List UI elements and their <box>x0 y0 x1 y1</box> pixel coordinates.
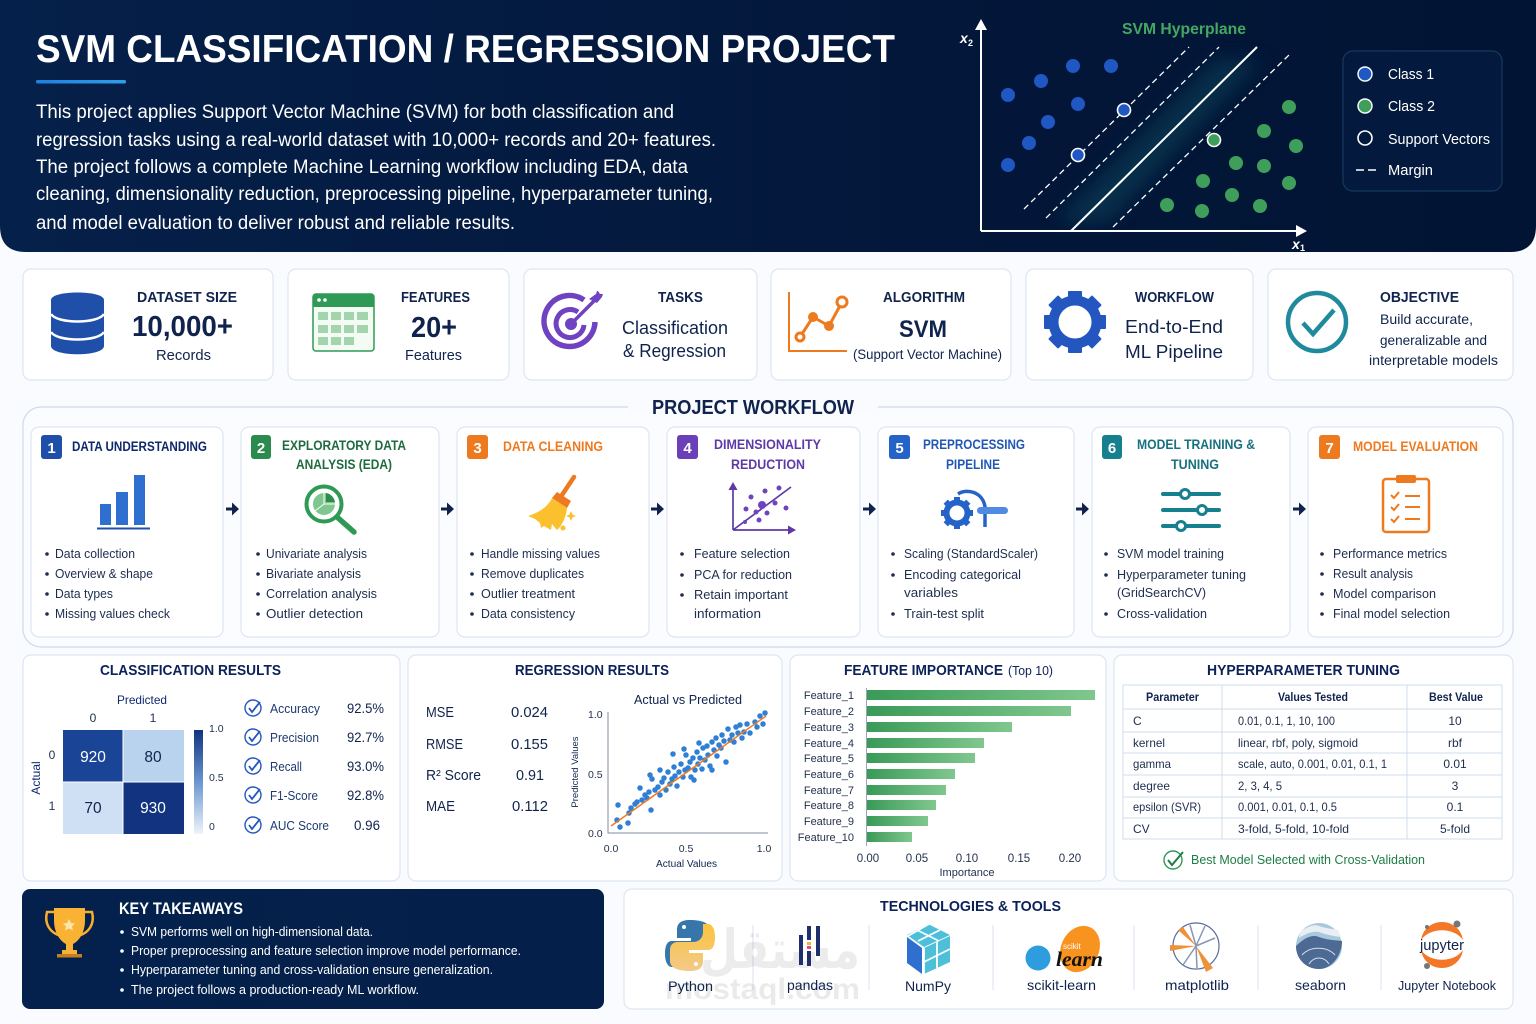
step 1 list: Overview & shape <box>55 566 153 581</box>
step 4: dimensionality reduction: 4 <box>683 440 692 457</box>
SVM hyperplane chart: 1 <box>1300 243 1305 253</box>
step 7 list: Model comparison <box>1333 586 1436 601</box>
stat card: objective: OBJECTIVE <box>1380 290 1459 306</box>
stat card: workflow: WORKFLOW <box>1135 290 1214 306</box>
scatter chart: actual vs predicted: 0.5 <box>679 843 693 855</box>
panel: feature importance <box>790 655 1106 881</box>
confusion matrix <box>29 693 184 834</box>
step 1 list <box>45 546 170 621</box>
hyperparameter table <box>1123 685 1502 839</box>
regression metrics <box>426 705 548 815</box>
icon: seaborn: seaborn <box>1295 977 1346 993</box>
project description: and model evaluation to deliver robust and reliable results. <box>36 213 515 234</box>
step 4: dimensionality reduction: DIMENSIONALITY <box>714 437 821 452</box>
project description: The project follows a complete Machine Learning workflow including EDA, data <box>36 157 688 178</box>
regression metrics: 0.024 <box>511 705 548 721</box>
step 7: model evaluation: MODEL EVALUATION <box>1353 439 1478 454</box>
step 5: preprocessing pipeline <box>878 427 1074 637</box>
classification metrics: 93.0% <box>347 759 384 774</box>
icon: sliders <box>1163 490 1219 530</box>
classification metrics: 92.7% <box>347 730 384 745</box>
step 7 list <box>1320 546 1450 621</box>
horizontal bar chart: Feature_10 <box>798 832 854 844</box>
stat card: dataset size: DATASET SIZE <box>137 290 237 306</box>
SVM hyperplane chart: SVM Hyperplane <box>1122 21 1246 38</box>
step 4: dimensionality reduction <box>667 427 860 637</box>
hyperparameter table: gamma <box>1133 757 1171 771</box>
horizontal bar chart: Feature_8 <box>804 800 854 812</box>
hyperparameter table: rbf <box>1448 736 1463 750</box>
horizontal bar chart: Feature_3 <box>804 722 854 734</box>
stat card: workflow <box>1026 269 1253 380</box>
step 5: preprocessing pipeline: PREPROCESSING <box>923 437 1025 452</box>
classification metrics: Precision <box>270 731 319 745</box>
step 6 list: Cross-validation <box>1117 606 1207 621</box>
step 6 list: (GridSearchCV) <box>1117 585 1206 600</box>
step 6 list <box>1104 546 1246 621</box>
panel: key takeaways: KEY TAKEAWAYS <box>119 900 243 918</box>
stat card: tasks: & Regression <box>623 340 726 361</box>
best model note: Best Model Selected with Cross-Validation <box>1191 853 1425 867</box>
hyperparameter table: 0.1 <box>1447 800 1464 814</box>
confusion matrix: 930 <box>140 800 166 817</box>
stat card: objective: Build accurate, <box>1380 311 1473 327</box>
watermark <box>665 918 860 1006</box>
horizontal bar chart: 0.15 <box>1008 853 1030 865</box>
step 6: model training and tuning: TUNING <box>1171 457 1219 472</box>
hyperparameter table: 3-fold, 5-fold, 10-fold <box>1238 822 1349 836</box>
step 1 list: Data collection <box>55 546 135 561</box>
hyperparameter table: 5-fold <box>1440 822 1470 836</box>
title underline <box>36 80 126 84</box>
hyperparameter table: 0.01 <box>1443 757 1467 771</box>
scatter chart: actual vs predicted: 0.5 <box>588 769 603 781</box>
project description: cleaning, dimensionality reduction, preprocessing pipeline, hyperparameter tuning, <box>36 184 713 205</box>
horizontal bar chart: Feature_6 <box>804 769 854 781</box>
stat card: features: FEATURES <box>401 290 470 306</box>
stat card: features: 20+ <box>411 312 457 344</box>
takeaway list: SVM performs well on high-dimensional data. <box>131 925 373 939</box>
stat card: tasks: Classification <box>622 317 728 338</box>
panel: classification results <box>23 655 400 881</box>
horizontal bar chart <box>798 688 1095 879</box>
step 3: data cleaning <box>457 427 649 637</box>
watermark: mostaql.com <box>665 973 860 1006</box>
workflow heading: PROJECT WORKFLOW <box>652 397 854 419</box>
step 2 list: Correlation analysis <box>266 586 377 601</box>
scatter chart: actual vs predicted <box>570 693 771 870</box>
stat card: objective: generalizable and <box>1380 332 1487 348</box>
step 3 list: Handle missing values <box>481 546 600 561</box>
step 3 list: Outlier treatment <box>481 586 575 601</box>
icon: numpy <box>905 924 951 994</box>
panel: hyperparameter tuning: HYPERPARAMETER TUNING <box>1207 662 1400 679</box>
SVM hyperplane chart: x <box>1291 236 1301 252</box>
hyperparameter table: C <box>1133 714 1142 728</box>
hyperparameter table: degree <box>1133 779 1170 793</box>
best model note <box>1164 851 1425 869</box>
step 6 list: Hyperparameter tuning <box>1117 567 1246 582</box>
scatter chart: actual vs predicted: 1.0 <box>757 843 771 855</box>
hyperparameter table: Best Value <box>1429 692 1483 704</box>
step 3: data cleaning: DATA CLEANING <box>503 439 603 454</box>
hyperparameter table: 0.001, 0.01, 0.1, 0.5 <box>1238 800 1337 814</box>
step 3 list: Data consistency <box>481 606 575 621</box>
step 2: exploratory data analysis: 2 <box>257 440 265 457</box>
confusion matrix: 0 <box>90 711 97 725</box>
chart legend: Support Vectors <box>1388 132 1490 148</box>
regression metrics: 0.112 <box>512 799 548 815</box>
step 7 list: Performance metrics <box>1333 546 1447 561</box>
step 3: data cleaning: 3 <box>473 440 482 457</box>
stat card: workflow: ML Pipeline <box>1125 341 1223 362</box>
stat card: dataset size <box>23 269 273 380</box>
colorbar <box>194 723 224 834</box>
regression metrics: MAE <box>426 799 455 815</box>
regression metrics: RMSE <box>426 737 463 753</box>
step 5 list: Scaling (StandardScaler) <box>904 546 1038 561</box>
step 4 list <box>680 546 792 621</box>
horizontal bar chart: Feature_4 <box>804 738 854 750</box>
icon: python <box>665 920 715 994</box>
confusion matrix: 0 <box>49 748 56 762</box>
SVM hyperplane chart <box>959 19 1307 253</box>
panel: technologies and tools: TECHNOLOGIES & TOOLS <box>880 898 1061 915</box>
horizontal bar chart: 0.00 <box>857 853 879 865</box>
hyperparameter table: Values Tested <box>1278 692 1348 704</box>
classification metrics <box>245 700 384 833</box>
step 5 list: Train-test split <box>904 606 984 621</box>
step 3 list: Remove duplicates <box>481 566 584 581</box>
classification metrics: Accuracy <box>270 702 321 716</box>
step 2: exploratory data analysis: ANALYSIS (EDA) <box>296 457 392 472</box>
classification metrics: 92.8% <box>347 788 384 803</box>
horizontal bar chart: Importance <box>939 867 995 879</box>
hyperparameter table: 3 <box>1452 779 1459 793</box>
header banner <box>0 0 1536 253</box>
chart legend: Class 1 <box>1388 67 1434 83</box>
classification metrics: 0.96 <box>354 818 380 833</box>
step 6: model training and tuning <box>1092 427 1290 637</box>
step 7: model evaluation <box>1308 427 1503 637</box>
hyperparameter table: Parameter <box>1146 692 1199 704</box>
icon: matplotlib: matplotlib <box>1165 977 1229 993</box>
icon: magnifier with pie <box>306 486 354 532</box>
step 6: model training and tuning: MODEL TRAINING & <box>1137 437 1255 452</box>
confusion matrix: 80 <box>144 749 162 766</box>
workflow section frame <box>23 397 1513 647</box>
confusion matrix: Predicted <box>117 693 167 707</box>
panel: hyperparameter tuning <box>1114 655 1513 881</box>
stat card: objective <box>1268 269 1513 380</box>
stat card: algorithm <box>771 269 1011 380</box>
horizontal bar chart: Feature_7 <box>804 785 854 797</box>
stat card: features <box>288 269 509 380</box>
icon: broom <box>528 477 576 530</box>
step 1 list: Data types <box>55 586 113 601</box>
step 5: preprocessing pipeline: PIPELINE <box>946 457 1000 472</box>
SVM hyperplane chart: 2 <box>968 38 973 48</box>
arrow 2 to 3 <box>441 502 454 516</box>
arrow 3 to 4 <box>651 502 664 516</box>
step 6 list: SVM model training <box>1117 546 1224 561</box>
panel: feature importance: FEATURE IMPORTANCE <box>844 662 1003 679</box>
takeaway list: Proper preprocessing and feature selection improve model performance. <box>131 944 521 958</box>
colorbar: 1.0 <box>209 723 224 735</box>
colorbar: 0.5 <box>209 772 224 784</box>
stat card: dataset size: Records <box>156 348 211 364</box>
step 6: model training and tuning: 6 <box>1108 440 1116 457</box>
step 3 list <box>470 546 600 621</box>
icon: gear and pipeline <box>941 491 1008 529</box>
icon: python: Python <box>668 978 713 994</box>
step 7 list: Result analysis <box>1333 566 1413 581</box>
step 1 list: Missing values check <box>55 606 170 621</box>
scatter chart: actual vs predicted: Actual vs Predicted <box>634 693 742 707</box>
classification metrics: 92.5% <box>347 701 384 716</box>
scatter chart: actual vs predicted: Predicted Values <box>570 736 581 808</box>
scatter chart: actual vs predicted: 0.0 <box>604 843 618 855</box>
horizontal bar chart: Feature_9 <box>804 816 854 828</box>
horizontal bar chart: 0.05 <box>906 853 928 865</box>
confusion matrix: Actual <box>29 761 43 795</box>
step 4 list: Retain important <box>694 587 788 602</box>
project description: This project applies Support Vector Machine (SVM) for both classification and <box>36 102 674 123</box>
icon: numpy: NumPy <box>905 978 951 994</box>
step 2: exploratory data analysis: EXPLORATORY DATA <box>282 438 406 453</box>
regression metrics: MSE <box>426 705 454 721</box>
chart legend <box>1343 51 1502 191</box>
step 5 list <box>891 546 1038 621</box>
project description: regression tasks using a real-world dataset with 10,000+ records and 20+ features. <box>36 130 716 151</box>
step 5: preprocessing pipeline: 5 <box>895 440 904 457</box>
horizontal bar chart: Feature_5 <box>804 753 854 765</box>
stat card: tasks: TASKS <box>658 290 703 306</box>
stat card: dataset size: 10,000+ <box>132 311 233 343</box>
stat card: objective: interpretable models <box>1369 352 1498 368</box>
icon: PCA scatter <box>728 482 796 534</box>
confusion matrix: 1 <box>150 711 157 725</box>
stat card: tasks <box>524 269 757 380</box>
icon: jupyter: jupyter <box>1419 937 1464 954</box>
SVM hyperplane chart: x <box>959 30 969 46</box>
step 5 list: variables <box>904 585 959 600</box>
step 2 list: Outlier detection <box>266 606 363 621</box>
regression metrics: 0.155 <box>511 737 548 753</box>
panel: key takeaways <box>22 889 604 1009</box>
arrow 1 to 2 <box>226 502 239 516</box>
regression metrics: R² Score <box>426 768 481 784</box>
icon: seaborn <box>1295 923 1346 993</box>
icon: scikit-learn: scikit-learn <box>1027 977 1096 993</box>
chart legend: Margin <box>1388 163 1433 179</box>
icon: pandas <box>787 926 833 993</box>
stat card: algorithm: (Support Vector Machine) <box>853 347 1002 362</box>
step 1: data understanding: 1 <box>47 440 56 457</box>
stat card: algorithm: SVM <box>899 316 947 343</box>
classification metrics: F1-Score <box>270 789 318 803</box>
takeaway list: The project follows a production-ready ML workflow. <box>131 983 419 997</box>
chart legend: Class 2 <box>1388 99 1435 115</box>
confusion matrix: 1 <box>49 799 56 813</box>
scatter chart: actual vs predicted: Actual Values <box>656 859 717 870</box>
title: SVM CLASSIFICATION / REGRESSION PROJECT <box>36 28 895 71</box>
takeaway list <box>120 925 521 997</box>
classification metrics: AUC Score <box>270 819 329 833</box>
icon: bar chart <box>97 475 150 530</box>
step 7 list: Final model selection <box>1333 606 1450 621</box>
panel: feature importance: (Top 10) <box>1008 664 1053 678</box>
step 4 list: PCA for reduction <box>694 567 792 582</box>
icon: target <box>544 291 603 346</box>
icon: pandas: pandas <box>787 977 833 993</box>
hyperparameter table: CV <box>1133 822 1150 836</box>
step 7: model evaluation: 7 <box>1325 440 1334 457</box>
panel: technologies and tools <box>624 889 1513 1009</box>
panel: classification results: CLASSIFICATION RESULTS <box>100 662 281 679</box>
icon: database <box>51 292 104 354</box>
step 1: data understanding <box>31 427 223 637</box>
step 4: dimensionality reduction: REDUCTION <box>731 457 805 472</box>
confusion matrix: 920 <box>80 749 106 766</box>
arrow 4 to 5 <box>863 502 876 516</box>
icon: clipboard checklist <box>1383 475 1429 532</box>
watermark: مستقل <box>700 918 860 981</box>
horizontal bar chart: Feature_1 <box>804 690 854 702</box>
step 2 list: Bivariate analysis <box>266 566 361 581</box>
panel: regression results: REGRESSION RESULTS <box>515 662 669 679</box>
hyperparameter table: scale, auto, 0.001, 0.01, 0.1, 1 <box>1238 757 1387 771</box>
confusion matrix: 70 <box>84 800 102 817</box>
hyperparameter table: 10 <box>1448 714 1462 728</box>
scatter chart: actual vs predicted: 0.0 <box>588 828 603 840</box>
hyperparameter table: epsilon (SVR) <box>1133 800 1201 814</box>
step 4 list: information <box>694 606 761 621</box>
step 2 list: Univariate analysis <box>266 546 367 561</box>
hyperparameter table: kernel <box>1133 736 1165 750</box>
regression metrics: 0.91 <box>516 768 544 784</box>
scatter chart: actual vs predicted: 1.0 <box>588 709 603 721</box>
colorbar: 0 <box>209 821 215 833</box>
stat card: workflow: End-to-End <box>1125 316 1223 337</box>
horizontal bar chart: 0.20 <box>1059 853 1081 865</box>
project description <box>36 102 716 234</box>
icon: scikit-learn: scikit <box>1063 942 1082 951</box>
step 5 list: Encoding categorical <box>904 567 1021 582</box>
icon: jupyter: Jupyter Notebook <box>1398 978 1496 993</box>
step 4 list: Feature selection <box>694 546 790 561</box>
icon: trophy <box>46 908 93 958</box>
arrow 5 to 6 <box>1076 502 1089 516</box>
takeaway list: Hyperparameter tuning and cross-validation ensure generalization. <box>131 963 493 977</box>
step 1: data understanding: DATA UNDERSTANDING <box>72 439 207 454</box>
step 2 list <box>256 546 377 621</box>
icon: gear <box>1044 291 1106 353</box>
classification metrics: Recall <box>270 760 302 774</box>
stat card: algorithm: ALGORITHM <box>883 290 965 306</box>
icon: check circle <box>1288 293 1346 351</box>
arrow 6 to 7 <box>1293 502 1306 516</box>
hyperparameter table: 0.01, 0.1, 1, 10, 100 <box>1238 714 1335 728</box>
step 2: exploratory data analysis <box>241 427 439 637</box>
icon: line chart <box>789 292 847 351</box>
horizontal bar chart: Feature_2 <box>804 706 854 718</box>
stat card: features: Features <box>405 348 462 364</box>
panel: regression results <box>408 655 782 881</box>
icon: scikit-learn: learn <box>1056 947 1103 971</box>
icon: data table <box>313 294 374 351</box>
hyperparameter table: linear, rbf, poly, sigmoid <box>1238 736 1358 750</box>
hyperparameter table: 2, 3, 4, 5 <box>1238 779 1282 793</box>
horizontal bar chart: 0.10 <box>956 853 978 865</box>
icon: matplotlib <box>1165 923 1229 993</box>
icon: scikit-learn <box>1026 919 1107 993</box>
icon: jupyter <box>1398 920 1496 993</box>
